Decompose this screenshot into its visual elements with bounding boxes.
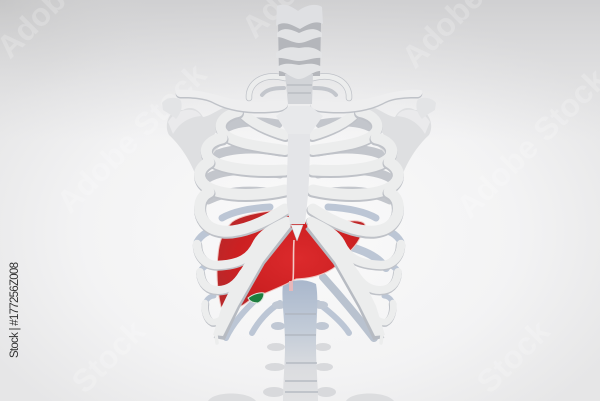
C1 vertebra	[276, 5, 323, 29]
left rib cage half	[162, 76, 293, 343]
manubrium	[276, 106, 323, 134]
watermarks: Stock	[469, 313, 557, 400]
sternum	[276, 106, 323, 241]
gallbladder	[248, 293, 264, 303]
C2 vertebra	[277, 29, 322, 43]
stock id text: Stock | #177256Z008	[9, 262, 21, 358]
liver	[217, 210, 365, 307]
sternum body	[287, 134, 310, 224]
right rib cage half	[305, 76, 436, 343]
liver fold	[293, 240, 294, 281]
watermarks: Stock	[64, 313, 152, 400]
back lower ribs	[226, 245, 386, 338]
xiphoid	[291, 225, 303, 241]
hepatic duct	[289, 281, 293, 291]
cervical spine	[276, 5, 323, 104]
C4 vertebra	[277, 64, 322, 79]
pelvis	[208, 394, 394, 401]
C3 vertebra	[276, 47, 322, 61]
thoracic and lumbar spine	[263, 280, 336, 401]
watermarks: Adobe Stock	[49, 56, 213, 220]
